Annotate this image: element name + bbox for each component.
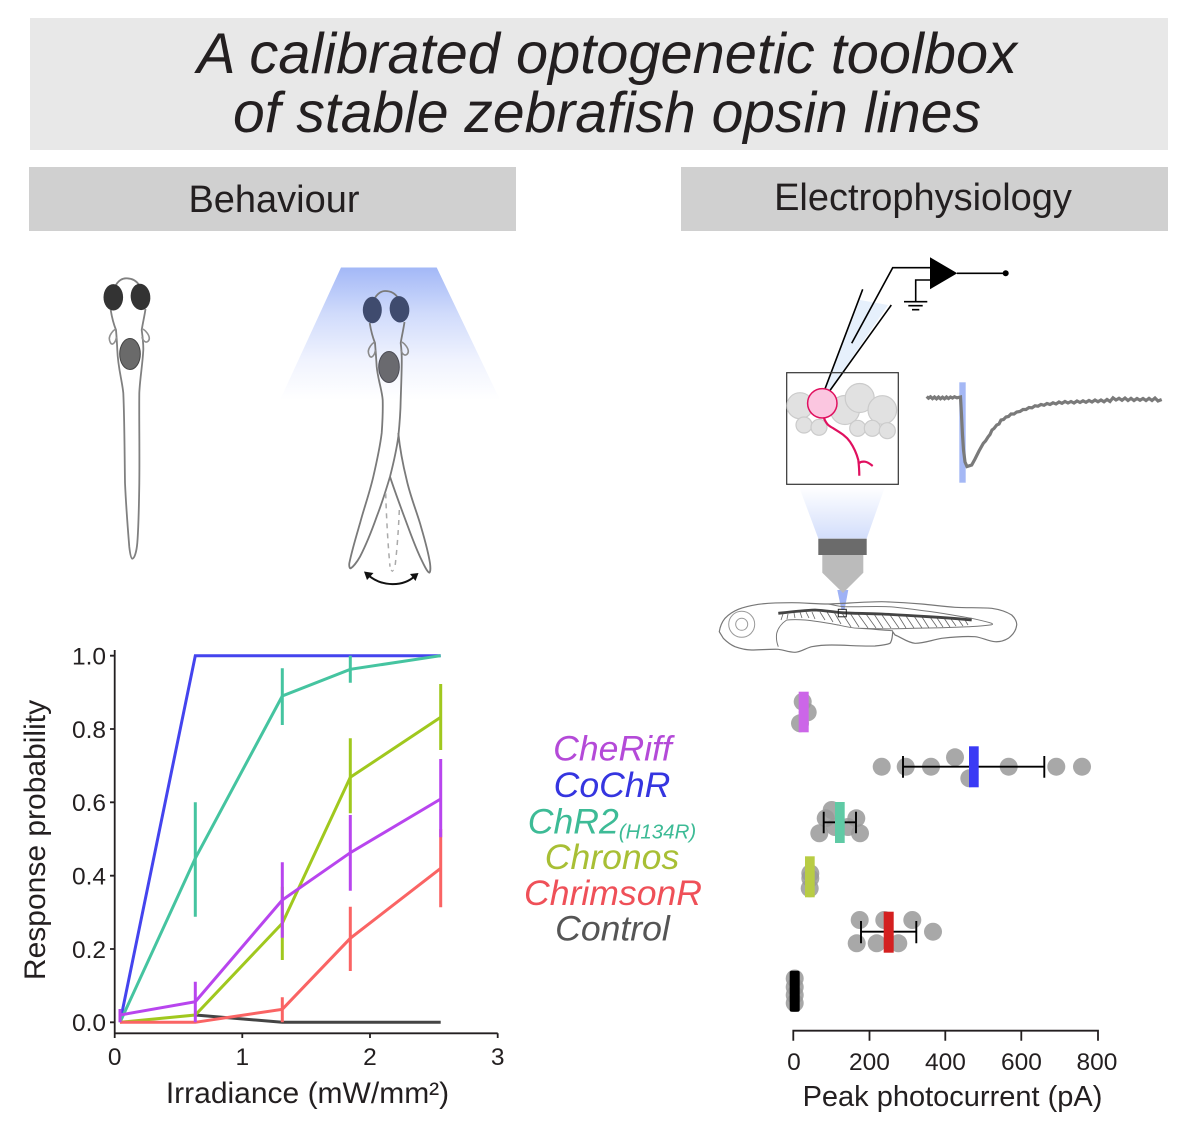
series: ChrimsonR xyxy=(120,829,441,1022)
y tick labels: 0.2 xyxy=(72,937,106,964)
series: CoChR xyxy=(120,656,441,1022)
title xyxy=(30,18,1168,150)
line chart: response probability xyxy=(19,644,505,1110)
x tick labels xyxy=(787,1049,1117,1076)
arrow: tail movement xyxy=(364,572,418,584)
row: CoChR xyxy=(873,746,1091,787)
illustration: zebrafish larva side view xyxy=(719,602,1017,652)
legend: ChR2 xyxy=(528,801,619,841)
y tick labels xyxy=(72,644,106,1037)
series: CheRiff xyxy=(120,759,441,1022)
illustration: microscope light beam xyxy=(799,487,885,538)
row: ChrimsonR xyxy=(848,911,942,953)
legend: CoChR xyxy=(554,765,670,805)
illustration: tail-flicking larva xyxy=(349,291,430,573)
x tick labels: 200 xyxy=(849,1049,890,1076)
heading: Behaviour: Behaviour xyxy=(188,179,360,221)
heading: Electrophysiology xyxy=(681,167,1168,231)
series: ChR2 xyxy=(120,656,441,1022)
axes xyxy=(110,650,498,1038)
chart: photocurrent trace xyxy=(927,382,1162,483)
row: ChR2 xyxy=(810,801,869,843)
y axis title: Response probability xyxy=(19,700,52,980)
x axis title: Peak photocurrent (pA) xyxy=(803,1081,1102,1113)
heading: Behaviour xyxy=(29,167,516,231)
row: Control xyxy=(786,970,804,1012)
illustration: imaging box with neurons xyxy=(787,373,898,484)
x axis title: Irradiance (mW/mm²) xyxy=(166,1077,449,1110)
x tick labels: 600 xyxy=(1001,1049,1042,1076)
x tick labels: 400 xyxy=(925,1049,966,1076)
x tick labels xyxy=(108,1044,505,1071)
x axis xyxy=(793,1031,1098,1041)
illustration: resting larva xyxy=(104,278,152,559)
y tick labels: 1.0 xyxy=(72,644,106,670)
legend: ChrimsonR xyxy=(524,873,702,913)
legend: CheRiff xyxy=(553,729,675,769)
series: Control xyxy=(195,1015,441,1022)
legend: (H134R) xyxy=(619,820,696,843)
y tick labels: 0.0 xyxy=(72,1010,106,1037)
heading: Electrophysiology: Electrophysiology xyxy=(774,177,1072,219)
legend xyxy=(524,729,702,948)
title: of stable zebrafish opsin lines xyxy=(233,81,981,145)
illustration: objective lens xyxy=(818,539,867,610)
legend: Chronos xyxy=(545,837,679,877)
illustration: recording pipette xyxy=(823,289,891,395)
x tick labels: 800 xyxy=(1077,1049,1117,1076)
light cone: behaviour stimulus xyxy=(280,268,500,400)
row: Chronos xyxy=(801,856,819,897)
y tick labels: 0.4 xyxy=(72,864,106,890)
title: A calibrated optogenetic toolbox xyxy=(194,22,1019,86)
row: CheRiff xyxy=(791,692,817,732)
x tick labels: 3 xyxy=(491,1044,505,1071)
dot plot: peak photocurrent xyxy=(786,692,1117,1113)
x tick labels: 1 xyxy=(235,1044,249,1071)
x tick labels: 0 xyxy=(787,1049,801,1076)
x tick labels: 2 xyxy=(363,1044,377,1071)
x tick labels: 0 xyxy=(108,1044,122,1071)
y tick labels: 0.8 xyxy=(72,717,106,744)
series: Chronos xyxy=(120,684,441,1022)
y tick labels: 0.6 xyxy=(72,790,106,817)
legend: Control xyxy=(555,908,671,948)
illustration: patch amplifier circuit xyxy=(852,257,1009,343)
